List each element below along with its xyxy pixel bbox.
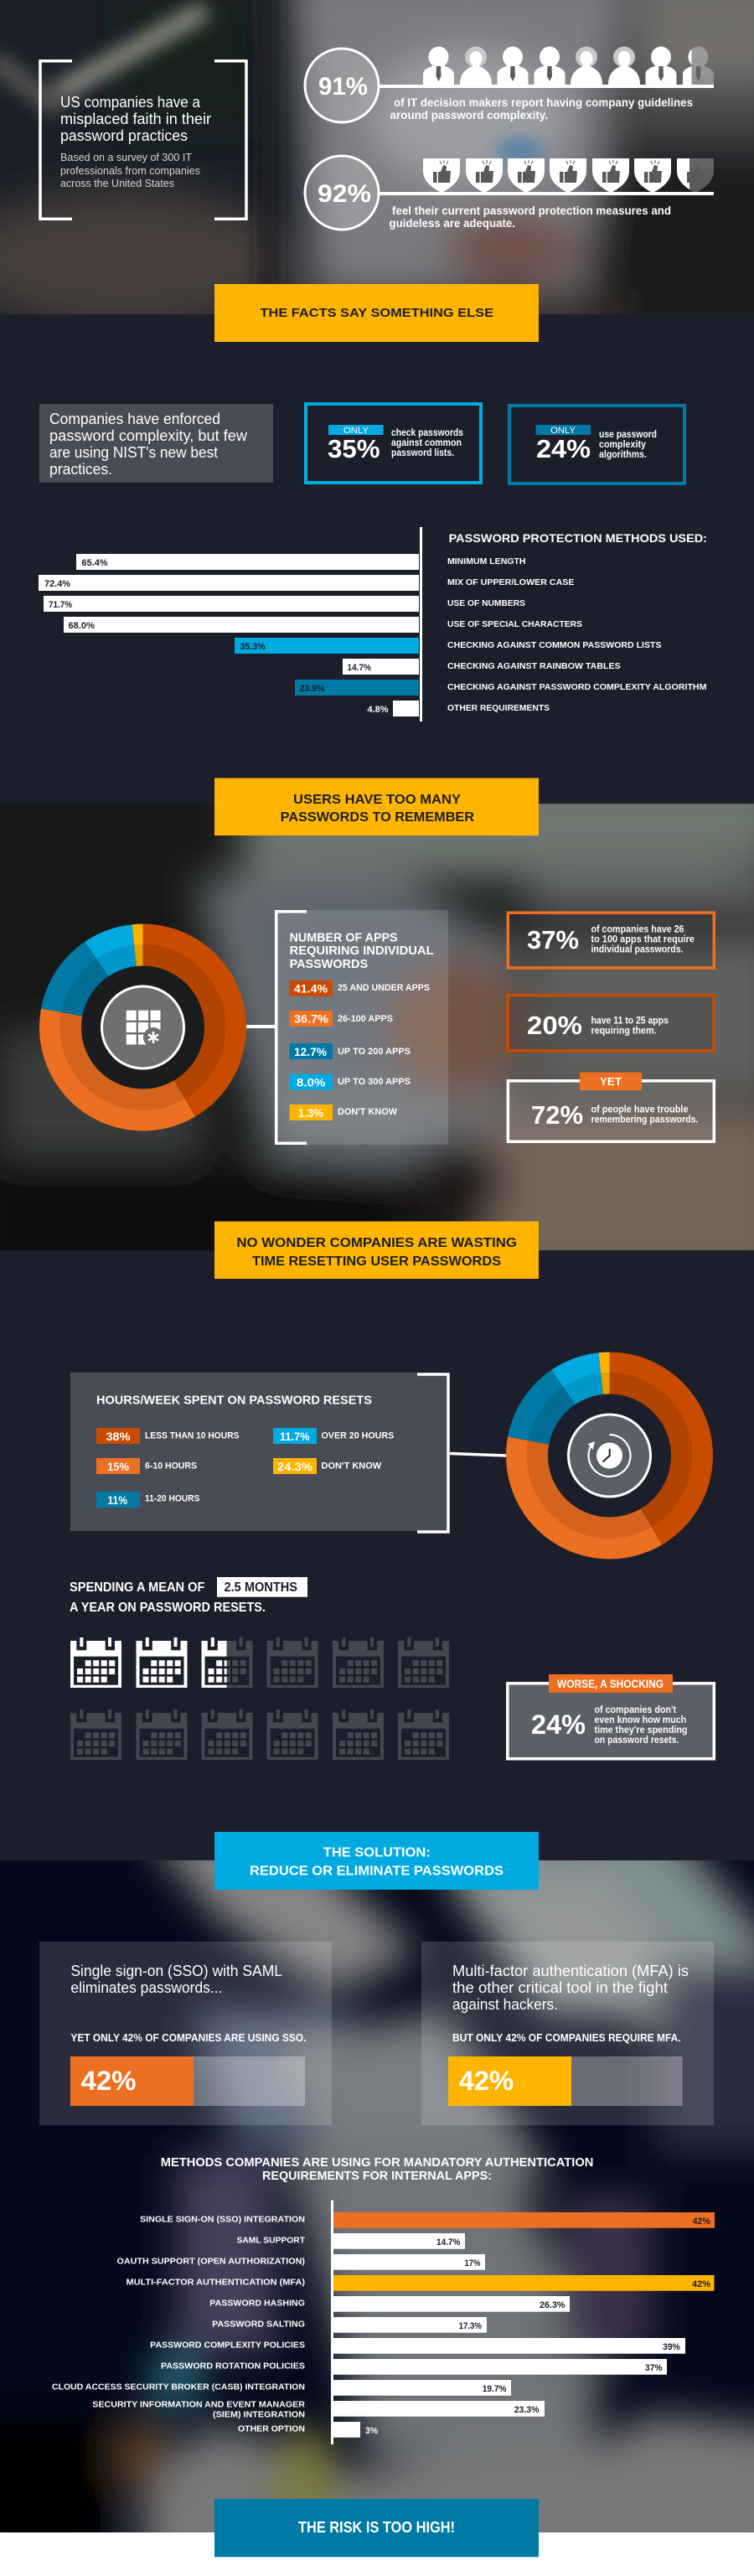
stat: 92 percent: guideless are adequate.	[389, 216, 515, 230]
intro bracket	[40, 61, 246, 219]
donut chart: number of apps	[39, 923, 246, 1130]
chart category labels: PASSWORD HASHING	[209, 2299, 305, 2309]
stat: 91 percent: 91%	[318, 73, 368, 101]
panel: multi-factor authentication: the other critical tool in the fight	[452, 1979, 668, 1996]
callout: 35 percent: 35%	[328, 434, 380, 463]
legend item 8.0: UP TO 300 APPS	[338, 1077, 411, 1087]
panel: apps legend	[275, 910, 448, 1145]
chart category labels: OTHER OPTION	[238, 2424, 305, 2434]
text: mean months spent: 2.5 MONTHS	[225, 1580, 297, 1595]
bar chart: authentication methods: 37%	[645, 2363, 663, 2373]
callout: 20 percent: have 11 to 25 apps	[591, 1014, 669, 1026]
legend item 1.3: DON'T KNOW	[338, 1107, 398, 1117]
chart category labels: SAML SUPPORT	[236, 2236, 306, 2246]
heading: authentication methods: METHODS COMPANIES ARE USING FOR MANDATORY AUTHENTICATION	[161, 2155, 593, 2170]
callout: 24 percent: complexity	[599, 438, 646, 450]
intro heading	[60, 94, 211, 144]
panel: multi-factor authentication	[421, 1942, 714, 2125]
callout: 72 percent: remembering passwords.	[591, 1114, 699, 1125]
bar chart: password protection methods: 14.7%	[347, 663, 371, 673]
bar chart: authentication methods: 17.3%	[459, 2321, 482, 2331]
intro heading: misplaced faith in their	[60, 111, 211, 127]
bar chart: password protection methods: 35.3%	[240, 642, 266, 652]
banner: the solution: REDUCE OR ELIMINATE PASSWORDS	[250, 1865, 504, 1879]
callout: 35 percent: check passwords	[391, 427, 463, 438]
panel: multi-factor authentication: against hackers.	[452, 1996, 558, 2013]
banner: wasting time	[214, 1222, 539, 1279]
chart category labels: USE OF NUMBERS	[447, 598, 525, 608]
intro heading: password practices	[60, 127, 188, 144]
progress bar: MFA 42 percent: 42%	[459, 2066, 514, 2096]
intro survey note: professionals from companies	[60, 164, 200, 177]
chart category labels: MULTI-FACTOR AUTHENTICATION (MFA)	[126, 2278, 305, 2288]
callout: 24 percent: ONLY	[550, 426, 576, 436]
chart heading: PASSWORD PROTECTION METHODS USED:	[449, 531, 707, 545]
section two blurred photo background	[0, 804, 754, 1250]
banner: too many passwords: PASSWORDS TO REMEMBER	[281, 810, 474, 825]
chart category labels	[52, 2215, 306, 2434]
chart category labels: PASSWORD SALTING	[212, 2320, 305, 2330]
callout: 37 percent	[508, 913, 714, 968]
icon row: thumbs up shields	[423, 158, 714, 193]
chart category labels: USE OF SPECIAL CHARACTERS	[447, 619, 582, 629]
callout: 35 percent: against common	[391, 437, 462, 448]
stat: 91 percent	[305, 47, 714, 122]
legend item 41.4: 41.4%	[294, 982, 328, 996]
bar chart: password protection methods: 71.7%	[49, 600, 72, 610]
chart category labels: CHECKING AGAINST RAINBOW TABLES	[447, 661, 621, 671]
panel: hours per week legend	[70, 1373, 448, 1532]
panel: hours per week legend: HOURS/WEEK SPENT ON PASSWORD RESETS	[96, 1394, 372, 1408]
chart category labels: CHECKING AGAINST PASSWORD COMPLEXITY ALGORITHM	[447, 682, 707, 692]
progress bar: MFA 42 percent	[448, 2056, 683, 2106]
hero blurred photo background	[0, 0, 754, 314]
banner: risk too high	[214, 2499, 539, 2557]
intro heading: US companies have a	[60, 94, 201, 111]
panel: enforced complexity: password complexity, but few	[49, 427, 248, 444]
callout: 24 percent: 24%	[536, 434, 591, 463]
chart category labels: CHECKING AGAINST COMMON PASSWORD LISTS	[447, 640, 662, 650]
heading: authentication methods: REQUIREMENTS FOR INTERNAL APPS:	[262, 2169, 492, 2183]
bar chart: authentication methods: 23.3%	[514, 2405, 540, 2415]
chart category labels: PASSWORD COMPLEXITY POLICIES	[150, 2341, 305, 2351]
chart category labels: OAUTH SUPPORT (OPEN AUTHORIZATION)	[117, 2257, 305, 2267]
callout: 37 percent: to 100 apps that require	[591, 934, 695, 945]
legend item 36.7	[290, 1011, 393, 1027]
intro survey note	[60, 151, 200, 189]
banner: too many passwords	[214, 778, 539, 835]
callout: 24 percent: use password	[599, 428, 657, 440]
bar chart: authentication methods	[52, 2201, 715, 2444]
progress bar: SSO 42 percent: 42%	[80, 2066, 136, 2096]
bar chart: authentication methods: 17%	[464, 2258, 481, 2268]
bar chart: password protection methods: 65.4%	[82, 558, 108, 568]
callout: worse, 24 percent: of companies don't	[595, 1704, 676, 1715]
callout: worse, 24 percent: 24%	[531, 1710, 586, 1740]
progress bar: SSO 42 percent	[70, 2056, 305, 2106]
stat: 92 percent: feel their current password protection measures and	[392, 204, 671, 217]
callout: 24 percent: algorithms.	[599, 448, 647, 460]
legend item 15: 15%	[107, 1460, 130, 1473]
panel: enforced complexity	[39, 404, 273, 483]
intro survey note: across the United States	[60, 177, 174, 189]
callout: 35 percent: password lists.	[391, 447, 454, 458]
panel: single sign-on	[39, 1942, 332, 2125]
banner: risk too high: THE RISK IS TOO HIGH!	[298, 2519, 455, 2536]
legend item 8.0	[290, 1074, 411, 1090]
chart category labels: (SIEM) INTEGRATION	[213, 2410, 305, 2420]
panel: apps legend: REQUIRING INDIVIDUAL	[290, 944, 434, 958]
panel: apps legend: NUMBER OF APPS	[290, 930, 398, 944]
legend item 11	[96, 1492, 199, 1508]
panel: multi-factor authentication: BUT ONLY 42% OF COMPANIES REQUIRE MFA.	[452, 2032, 681, 2044]
legend item 41.4	[290, 980, 430, 996]
legend item 38: 38%	[106, 1430, 131, 1443]
legend item 11.7: 11.7%	[280, 1430, 310, 1443]
chart category labels: MINIMUM LENGTH	[447, 556, 526, 566]
legend item 41.4: 25 AND UNDER APPS	[338, 983, 430, 993]
bar chart: password protection methods: 72.4%	[44, 579, 70, 589]
legend item 12.7	[290, 1043, 411, 1059]
legend item 11.7: OVER 20 HOURS	[322, 1431, 394, 1441]
chart category labels: SECURITY INFORMATION AND EVENT MANAGER	[92, 2400, 305, 2410]
connector: legend to donut	[450, 1453, 506, 1456]
callout: 35 percent: ONLY	[343, 426, 369, 436]
legend item 24.3: 24.3%	[277, 1460, 313, 1473]
panel: apps legend: PASSWORDS	[290, 957, 368, 971]
callout: worse, 24 percent: on password resets.	[595, 1734, 679, 1746]
bar chart: authentication methods: 14.7%	[436, 2237, 461, 2248]
banner: the facts	[214, 284, 539, 342]
panel: single sign-on: Single sign-on (SSO) with SAML	[70, 1963, 282, 1979]
callout: 24 percent	[509, 406, 684, 484]
banner: too many passwords: USERS HAVE TOO MANY	[293, 793, 461, 807]
callout: 37 percent: 37%	[527, 925, 579, 954]
icon row: people	[423, 47, 714, 85]
bar chart: authentication methods: 39%	[663, 2342, 680, 2352]
panel: single sign-on: eliminates passwords...	[70, 1979, 222, 1996]
chart category labels: SINGLE SIGN-ON (SSO) INTEGRATION	[140, 2215, 305, 2225]
banner: wasting time: NO WONDER COMPANIES ARE WASTING	[236, 1236, 517, 1250]
callout: 72 percent: 72%	[531, 1100, 583, 1130]
bar chart: password protection methods: 23.9%	[300, 684, 325, 694]
callout: worse, 24 percent	[508, 1674, 714, 1759]
panel: enforced complexity: Companies have enforced	[49, 411, 220, 427]
legend item 12.7: 12.7%	[294, 1045, 328, 1058]
callout: worse, 24 percent: time they're spending	[595, 1724, 687, 1735]
legend item 24.3	[273, 1458, 382, 1474]
callout: 35 percent	[306, 404, 481, 483]
panel: enforced complexity: are using NIST's new best	[49, 444, 218, 461]
chart category labels: PASSWORD ROTATION POLICIES	[161, 2361, 305, 2372]
legend item 12.7: UP TO 200 APPS	[338, 1047, 411, 1057]
stat: 91 percent: of IT decision makers report having company guidelines	[394, 96, 693, 109]
callout: worse, 24 percent: WORSE, A SHOCKING	[557, 1677, 664, 1690]
icon: clock with circular arrow	[588, 1435, 631, 1477]
banner: the solution: THE SOLUTION:	[323, 1846, 431, 1860]
callout: 72 percent: of people have trouble	[591, 1103, 689, 1115]
panel: single sign-on: YET ONLY 42% OF COMPANIES ARE USING SSO.	[70, 2032, 306, 2044]
banner: wasting time: TIME RESETTING USER PASSWORDS	[252, 1254, 501, 1269]
footer white band	[0, 2532, 754, 2576]
callout: 72 percent: YET	[600, 1075, 622, 1088]
banner: the facts: THE FACTS SAY SOMETHING ELSE	[260, 306, 493, 320]
bar chart: authentication methods: 3%	[365, 2426, 378, 2436]
banner: the solution	[214, 1832, 539, 1890]
legend item 38: LESS THAN 10 HOURS	[145, 1431, 240, 1441]
legend item 36.7: 26-100 APPS	[338, 1014, 393, 1024]
bar chart: password protection methods	[39, 527, 707, 722]
callout: 72 percent	[508, 1073, 714, 1141]
legend item 15: 6-10 HOURS	[145, 1461, 197, 1472]
donut chart: hours per week	[506, 1353, 713, 1559]
intro survey note: Based on a survey of 300 IT	[60, 151, 192, 163]
chart category labels: OTHER REQUIREMENTS	[447, 703, 550, 713]
icon grid: calendars	[70, 1637, 449, 1760]
panel: multi-factor authentication: Multi-factor authentication (MFA) is	[452, 1963, 689, 1979]
panel: enforced complexity: practices.	[49, 461, 112, 478]
stat: 92 percent	[305, 156, 714, 230]
stat: 92 percent: 92%	[318, 180, 371, 208]
legend item 15	[96, 1458, 197, 1474]
text: mean months spent: A YEAR ON PASSWORD RESETS.	[70, 1601, 266, 1615]
legend item 1.3: 1.3%	[298, 1106, 324, 1120]
callout: 20 percent: 20%	[527, 1011, 582, 1040]
legend item 24.3: DON'T KNOW	[322, 1461, 382, 1472]
legend item 38	[96, 1428, 240, 1444]
bar chart: authentication methods: 26.3%	[540, 2300, 566, 2310]
chart category labels: CLOUD ACCESS SECURITY BROKER (CASB) INTEGRATION	[52, 2382, 305, 2392]
connector: donut to apps legend	[246, 1025, 275, 1028]
callout: 37 percent: of companies have 26	[591, 923, 684, 935]
bar chart: password protection methods: 68.0%	[69, 621, 95, 631]
callout: 20 percent	[508, 996, 714, 1051]
callout: 20 percent: requiring them.	[591, 1025, 657, 1037]
bar chart: authentication methods: 42%	[693, 2216, 710, 2227]
stat: 91 percent: around password complexity.	[390, 108, 548, 122]
heading: authentication methods	[161, 2155, 593, 2183]
bar chart: password protection methods: 4.8%	[367, 705, 389, 715]
legend item 1.3	[290, 1104, 398, 1120]
text: mean months spent	[70, 1577, 307, 1615]
icon: app grid with asterisk	[127, 1011, 163, 1047]
text: mean months spent: SPENDING A MEAN OF	[70, 1580, 205, 1595]
bar chart: authentication methods: 19.7%	[483, 2384, 507, 2394]
chart category labels: MIX OF UPPER/LOWER CASE	[447, 577, 575, 587]
chart category labels	[447, 556, 707, 713]
bar chart: authentication methods: 42%	[692, 2279, 710, 2289]
callout: worse, 24 percent: even know how much	[595, 1714, 686, 1725]
legend item 36.7: 36.7%	[294, 1012, 329, 1026]
callout: 37 percent: individual passwords.	[591, 944, 684, 955]
legend item 11.7	[273, 1428, 394, 1444]
legend item 8.0: 8.0%	[297, 1076, 326, 1089]
section three blurred photo background	[0, 1827, 754, 2573]
legend item 11: 11-20 HOURS	[145, 1494, 199, 1504]
legend item 11: 11%	[107, 1493, 127, 1507]
